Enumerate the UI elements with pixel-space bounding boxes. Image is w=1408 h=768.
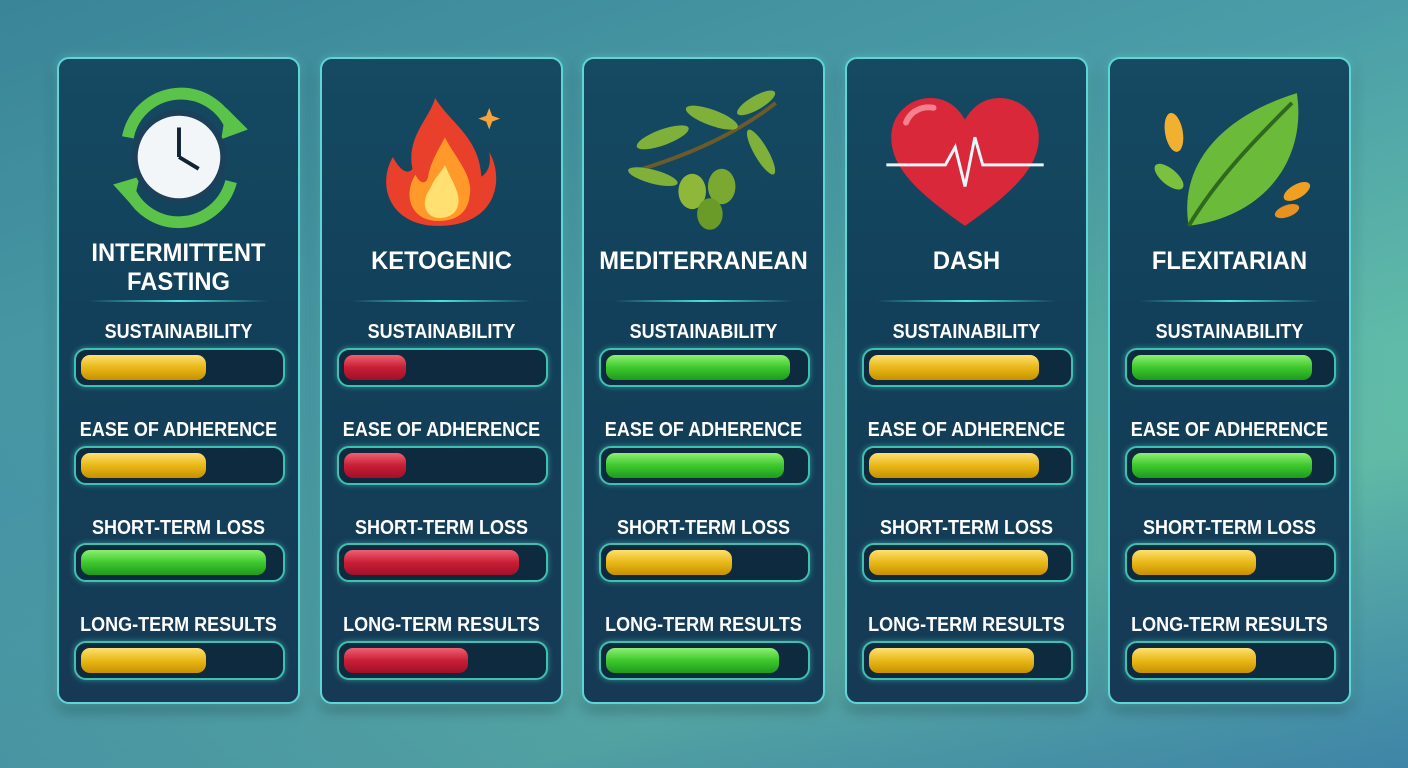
metric: sustainability: SUSTAINABILITY [105, 321, 252, 343]
metric: long-term: LONG-TERM RESULTS [343, 614, 540, 636]
bar [599, 641, 810, 680]
metric: short-term: SHORT-TERM LOSS [880, 517, 1053, 539]
bar [1125, 641, 1336, 680]
title: MEDITERRANEAN [599, 247, 808, 275]
bar [74, 348, 285, 387]
bar [599, 446, 810, 485]
title: KETOGENIC [371, 247, 512, 275]
bar [862, 641, 1073, 680]
title [91, 239, 266, 296]
metric: short-term: SHORT-TERM LOSS [1143, 517, 1316, 539]
bar [337, 348, 548, 387]
title: FLEXITARIAN [1152, 247, 1307, 275]
panel: intermittent fasting [57, 57, 300, 704]
metric: ease: EASE OF ADHERENCE [343, 419, 540, 441]
metric: long-term: LONG-TERM RESULTS [80, 614, 277, 636]
panel: ketogenic [320, 57, 563, 704]
metric: long-term: LONG-TERM RESULTS [1131, 614, 1328, 636]
metric: sustainability: SUSTAINABILITY [893, 321, 1040, 343]
bar [337, 641, 548, 680]
metric: short-term: SHORT-TERM LOSS [617, 517, 790, 539]
metric: ease: EASE OF ADHERENCE [868, 419, 1065, 441]
icon: olive branch [628, 90, 777, 230]
icon: leaf [1154, 93, 1310, 227]
metric: ease: EASE OF ADHERENCE [1131, 419, 1328, 441]
metric: ease: EASE OF ADHERENCE [605, 419, 802, 441]
bar [599, 348, 810, 387]
title: DASH [933, 247, 1000, 275]
bar [862, 446, 1073, 485]
bar [74, 446, 285, 485]
metric: short-term: SHORT-TERM LOSS [355, 517, 528, 539]
title: INTERMITTENT [91, 239, 266, 267]
panel: mediterranean [582, 57, 825, 704]
title: FASTING [127, 268, 230, 296]
bar [1125, 543, 1336, 582]
bar [1125, 348, 1336, 387]
icon: clock with arrows [113, 88, 248, 228]
bar [74, 641, 285, 680]
metric: sustainability: SUSTAINABILITY [1156, 321, 1303, 343]
bar [862, 348, 1073, 387]
metric: ease: EASE OF ADHERENCE [80, 419, 277, 441]
bar [74, 543, 285, 582]
bar [862, 543, 1073, 582]
bar [599, 543, 810, 582]
metric: sustainability: SUSTAINABILITY [630, 321, 777, 343]
metric: short-term: SHORT-TERM LOSS [92, 517, 265, 539]
metric: sustainability: SUSTAINABILITY [368, 321, 515, 343]
bar [1125, 446, 1336, 485]
icon: heart with pulse [886, 98, 1044, 226]
bar [337, 543, 548, 582]
bar [337, 446, 548, 485]
panel: dash [845, 57, 1088, 704]
metric: long-term: LONG-TERM RESULTS [605, 614, 802, 636]
panel: flexitarian [1108, 57, 1351, 704]
metric: long-term: LONG-TERM RESULTS [868, 614, 1065, 636]
icon: flame [386, 98, 500, 226]
